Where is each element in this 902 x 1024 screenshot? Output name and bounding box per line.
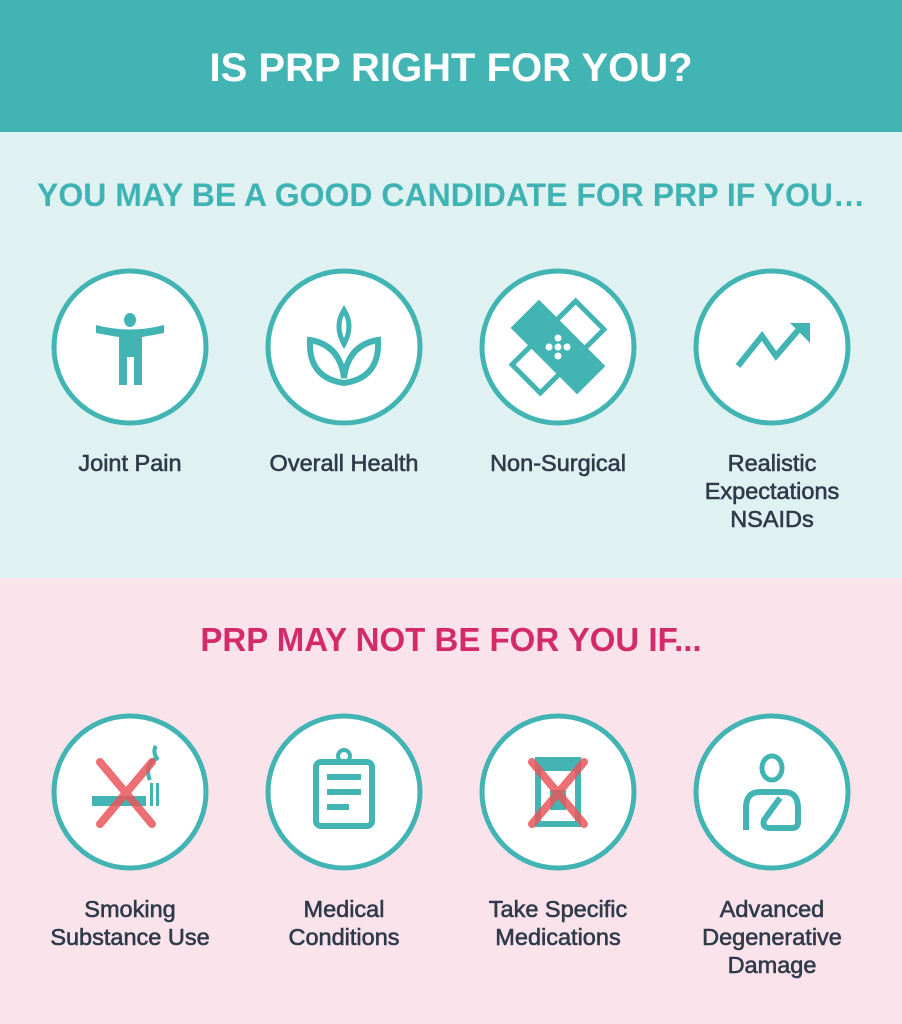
panel: not for you <box>0 578 902 1024</box>
labels: candidate: Non-Surgical <box>490 450 626 476</box>
labels: candidate <box>78 450 839 532</box>
icon: realistic expectations <box>696 271 848 423</box>
header banner <box>0 0 902 132</box>
icon: overall health <box>268 271 420 423</box>
labels: candidate: Joint Pain <box>78 450 182 476</box>
labels: candidate: Expectations <box>705 478 839 504</box>
icon: medical conditions <box>268 716 420 868</box>
labels: not for you: Take Specific <box>489 896 627 922</box>
labels: not for you: Advanced <box>720 896 824 922</box>
labels: candidate: NSAIDs <box>730 506 814 532</box>
labels: not for you: Degenerative <box>702 924 842 950</box>
labels: not for you <box>50 896 842 978</box>
icon: non-surgical <box>482 271 634 423</box>
icon: smoking <box>54 716 206 868</box>
icon: specific medications <box>482 716 634 868</box>
heading: good candidate: YOU MAY BE A GOOD CANDIDATE FOR PRP IF YOU… <box>37 177 865 213</box>
labels: candidate: Overall Health <box>270 450 418 476</box>
icon: degenerative damage <box>696 716 848 868</box>
heading: not for you: PRP MAY NOT BE FOR YOU IF... <box>200 621 702 658</box>
labels: not for you: Conditions <box>288 924 400 950</box>
title: IS PRP RIGHT FOR YOU? <box>209 46 693 90</box>
labels: not for you: Medications <box>495 924 621 950</box>
labels: candidate: Realistic <box>728 450 817 476</box>
labels: not for you: Substance Use <box>50 924 210 950</box>
icon: joint pain <box>54 271 206 423</box>
labels: not for you: Damage <box>728 952 816 978</box>
labels: not for you: Medical <box>304 896 384 922</box>
labels: not for you: Smoking <box>84 896 176 922</box>
panel: good candidate <box>0 132 902 578</box>
